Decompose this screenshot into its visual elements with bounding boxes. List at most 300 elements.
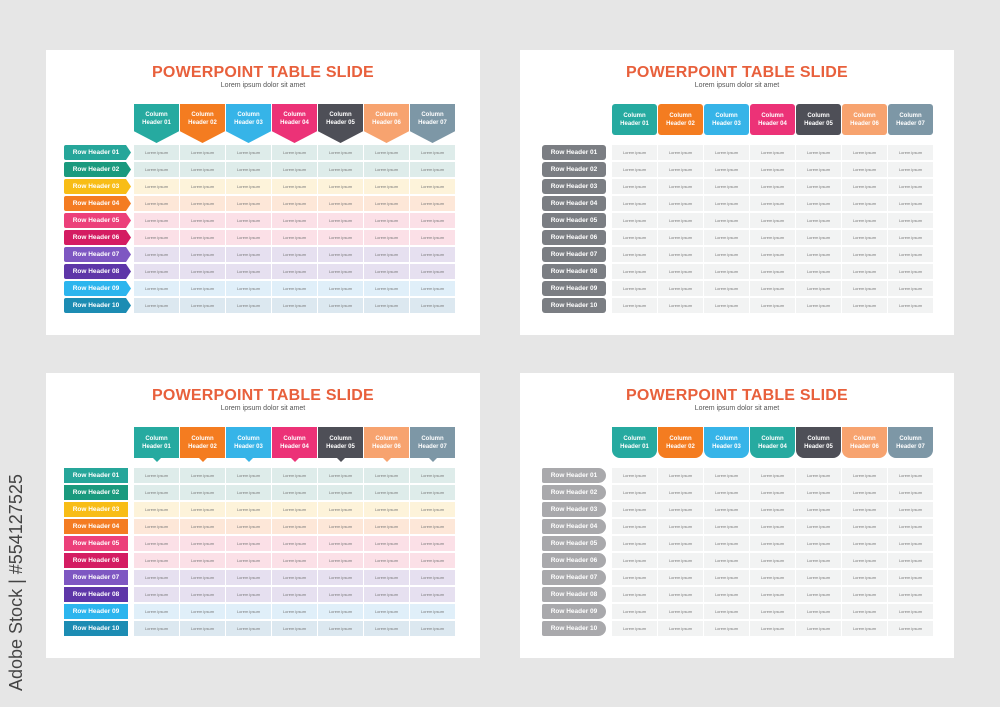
table rows: Lorem ipsum bbox=[145, 269, 168, 274]
table rows: Lorem ipsum bbox=[421, 507, 444, 512]
table rows: Lorem ipsum bbox=[237, 252, 260, 257]
table rows: Lorem ipsum bbox=[421, 252, 444, 257]
table rows: Lorem ipsum bbox=[421, 524, 444, 529]
column headers: Header 05 bbox=[804, 121, 833, 127]
table rows: Row Header 10 bbox=[551, 625, 597, 632]
column headers: Header 02 bbox=[188, 444, 217, 450]
column headers: Column bbox=[715, 113, 738, 119]
table rows: Lorem ipsum bbox=[853, 184, 876, 189]
table rows: Row Header 09 bbox=[551, 285, 597, 292]
table rows: Row Header 03 bbox=[73, 183, 119, 190]
column headers: Header 06 bbox=[850, 121, 879, 127]
table rows: Lorem ipsum bbox=[853, 235, 876, 240]
table rows: Lorem ipsum bbox=[237, 184, 260, 189]
table rows: Row Header 08 bbox=[73, 268, 119, 275]
table rows: Lorem ipsum bbox=[899, 269, 922, 274]
table rows: Lorem ipsum bbox=[669, 490, 692, 495]
table rows: Row Header 02 bbox=[73, 489, 119, 496]
table rows: Lorem ipsum bbox=[191, 473, 214, 478]
table rows: Lorem ipsum bbox=[237, 558, 260, 563]
table rows: Lorem ipsum bbox=[145, 167, 168, 172]
table rows: Lorem ipsum bbox=[329, 558, 352, 563]
table rows: Lorem ipsum bbox=[899, 286, 922, 291]
table rows: Lorem ipsum bbox=[191, 524, 214, 529]
column headers: Header 07 bbox=[418, 444, 447, 450]
table rows: Lorem ipsum bbox=[623, 473, 646, 478]
table rows: Lorem ipsum bbox=[283, 558, 306, 563]
column headers: Header 04 bbox=[758, 444, 787, 450]
table rows: Row Header 02 bbox=[551, 166, 597, 173]
table rows: Lorem ipsum bbox=[375, 592, 398, 597]
table rows: Lorem ipsum bbox=[283, 609, 306, 614]
table rows: Lorem ipsum bbox=[329, 592, 352, 597]
subtitle: Lorem ipsum dolor sit amet bbox=[695, 82, 779, 89]
table rows: Lorem ipsum bbox=[145, 473, 168, 478]
column headers: Header 02 bbox=[188, 120, 217, 126]
column headers: Column bbox=[807, 436, 830, 442]
table rows: Lorem ipsum bbox=[329, 269, 352, 274]
table rows: Lorem ipsum bbox=[853, 218, 876, 223]
table rows: Lorem ipsum bbox=[191, 558, 214, 563]
table rows: Lorem ipsum bbox=[237, 167, 260, 172]
table rows: Lorem ipsum bbox=[899, 184, 922, 189]
table rows: Lorem ipsum bbox=[237, 575, 260, 580]
table rows: Row Header 07 bbox=[551, 251, 597, 258]
table rows: Lorem ipsum bbox=[807, 184, 830, 189]
table rows: Lorem ipsum bbox=[761, 609, 784, 614]
table rows: Lorem ipsum bbox=[715, 558, 738, 563]
table rows: Lorem ipsum bbox=[329, 201, 352, 206]
column headers: Column bbox=[899, 436, 922, 442]
table rows: Row Header 02 bbox=[551, 489, 597, 496]
table rows: Lorem ipsum bbox=[715, 235, 738, 240]
table rows: Row Header 08 bbox=[73, 591, 119, 598]
column headers bbox=[612, 104, 933, 135]
column headers bbox=[134, 104, 455, 143]
column headers: Column bbox=[191, 112, 214, 118]
table rows: Lorem ipsum bbox=[329, 609, 352, 614]
column headers: Header 01 bbox=[620, 444, 649, 450]
table rows: Lorem ipsum bbox=[237, 626, 260, 631]
table rows: Lorem ipsum bbox=[669, 541, 692, 546]
table rows: Lorem ipsum bbox=[761, 626, 784, 631]
table rows: Lorem ipsum bbox=[807, 507, 830, 512]
table rows: Lorem ipsum bbox=[807, 218, 830, 223]
table rows: Lorem ipsum bbox=[421, 269, 444, 274]
column headers bbox=[612, 427, 933, 458]
table rows: Lorem ipsum bbox=[145, 609, 168, 614]
table rows: Lorem ipsum bbox=[329, 252, 352, 257]
table rows: Row Header 10 bbox=[73, 625, 119, 632]
table rows: Lorem ipsum bbox=[283, 507, 306, 512]
table rows: Lorem ipsum bbox=[807, 167, 830, 172]
table rows: Lorem ipsum bbox=[329, 167, 352, 172]
table rows: Lorem ipsum bbox=[421, 167, 444, 172]
table rows: Lorem ipsum bbox=[145, 524, 168, 529]
table rows: Lorem ipsum bbox=[237, 473, 260, 478]
table rows: Lorem ipsum bbox=[191, 218, 214, 223]
table rows: Lorem ipsum bbox=[191, 490, 214, 495]
table rows: Row Header 01 bbox=[73, 149, 119, 156]
table rows: Lorem ipsum bbox=[807, 303, 830, 308]
table rows: Lorem ipsum bbox=[715, 201, 738, 206]
table rows: Row Header 05 bbox=[73, 540, 119, 547]
table rows: Lorem ipsum bbox=[375, 303, 398, 308]
table rows: Lorem ipsum bbox=[283, 473, 306, 478]
table rows: Row Header 06 bbox=[551, 234, 597, 241]
table rows: Lorem ipsum bbox=[623, 303, 646, 308]
table rows: Lorem ipsum bbox=[421, 626, 444, 631]
table rows: Lorem ipsum bbox=[329, 184, 352, 189]
column headers: Header 05 bbox=[326, 444, 355, 450]
table rows: Lorem ipsum bbox=[191, 286, 214, 291]
table rows: Lorem ipsum bbox=[237, 609, 260, 614]
table rows: Lorem ipsum bbox=[669, 218, 692, 223]
table rows: Lorem ipsum bbox=[761, 507, 784, 512]
table rows: Lorem ipsum bbox=[761, 252, 784, 257]
table rows: Lorem ipsum bbox=[283, 541, 306, 546]
table rows: Lorem ipsum bbox=[761, 558, 784, 563]
subtitle: Lorem ipsum dolor sit amet bbox=[695, 405, 779, 412]
column headers: Column bbox=[375, 436, 398, 442]
table rows: Lorem ipsum bbox=[145, 235, 168, 240]
table rows: Lorem ipsum bbox=[853, 167, 876, 172]
table rows: Row Header 01 bbox=[551, 149, 597, 156]
column headers: Column bbox=[145, 436, 168, 442]
table rows: Lorem ipsum bbox=[899, 609, 922, 614]
table rows: Lorem ipsum bbox=[807, 252, 830, 257]
table rows: Lorem ipsum bbox=[715, 575, 738, 580]
table rows: Lorem ipsum bbox=[853, 490, 876, 495]
column headers: Column bbox=[237, 112, 260, 118]
column headers: Header 06 bbox=[850, 444, 879, 450]
table rows: Lorem ipsum bbox=[669, 524, 692, 529]
table rows: Lorem ipsum bbox=[715, 609, 738, 614]
table rows: Lorem ipsum bbox=[669, 303, 692, 308]
table rows: Lorem ipsum bbox=[191, 235, 214, 240]
table rows: Lorem ipsum bbox=[761, 218, 784, 223]
table rows: Lorem ipsum bbox=[899, 490, 922, 495]
table rows: Lorem ipsum bbox=[421, 150, 444, 155]
table rows: Lorem ipsum bbox=[715, 184, 738, 189]
table rows: Lorem ipsum bbox=[329, 286, 352, 291]
table rows: Lorem ipsum bbox=[283, 286, 306, 291]
table rows: Lorem ipsum bbox=[761, 473, 784, 478]
table rows: Lorem ipsum bbox=[145, 592, 168, 597]
table rows: Lorem ipsum bbox=[623, 490, 646, 495]
table rows: Lorem ipsum bbox=[807, 490, 830, 495]
table rows: Lorem ipsum bbox=[283, 150, 306, 155]
table rows: Lorem ipsum bbox=[145, 626, 168, 631]
table rows bbox=[542, 468, 933, 636]
table rows: Lorem ipsum bbox=[623, 218, 646, 223]
table rows: Lorem ipsum bbox=[899, 303, 922, 308]
table rows: Row Header 09 bbox=[73, 608, 119, 615]
table rows: Lorem ipsum bbox=[715, 592, 738, 597]
column headers: Header 03 bbox=[234, 444, 263, 450]
column headers: Column bbox=[715, 436, 738, 442]
column headers: Header 02 bbox=[666, 121, 695, 127]
table rows: Lorem ipsum bbox=[237, 592, 260, 597]
table rows: Lorem ipsum bbox=[623, 626, 646, 631]
table rows: Lorem ipsum bbox=[669, 473, 692, 478]
table rows: Lorem ipsum bbox=[623, 592, 646, 597]
table rows: Lorem ipsum bbox=[237, 303, 260, 308]
table rows: Row Header 08 bbox=[551, 591, 597, 598]
table rows: Lorem ipsum bbox=[715, 150, 738, 155]
table rows: Lorem ipsum bbox=[375, 558, 398, 563]
column headers: Header 07 bbox=[896, 121, 925, 127]
table rows: Lorem ipsum bbox=[669, 269, 692, 274]
table rows: Lorem ipsum bbox=[899, 252, 922, 257]
table rows: Lorem ipsum bbox=[283, 575, 306, 580]
table rows: Lorem ipsum bbox=[191, 507, 214, 512]
table rows: Lorem ipsum bbox=[899, 218, 922, 223]
table rows: Lorem ipsum bbox=[807, 575, 830, 580]
table rows: Lorem ipsum bbox=[669, 252, 692, 257]
table rows: Row Header 02 bbox=[73, 166, 119, 173]
table rows: Lorem ipsum bbox=[853, 575, 876, 580]
table rows: Lorem ipsum bbox=[421, 473, 444, 478]
table rows: Lorem ipsum bbox=[191, 252, 214, 257]
table rows: Lorem ipsum bbox=[853, 269, 876, 274]
table rows: Lorem ipsum bbox=[375, 609, 398, 614]
table rows: Lorem ipsum bbox=[421, 286, 444, 291]
table rows: Lorem ipsum bbox=[421, 184, 444, 189]
table rows: Lorem ipsum bbox=[761, 490, 784, 495]
table rows: Row Header 05 bbox=[551, 217, 597, 224]
table rows: Lorem ipsum bbox=[329, 626, 352, 631]
column headers: Column bbox=[623, 436, 646, 442]
table rows: Lorem ipsum bbox=[375, 473, 398, 478]
table rows: Lorem ipsum bbox=[421, 575, 444, 580]
column headers: Column bbox=[669, 436, 692, 442]
table rows: Lorem ipsum bbox=[669, 609, 692, 614]
title: POWERPOINT TABLE SLIDE bbox=[152, 64, 374, 81]
subtitle: Lorem ipsum dolor sit amet bbox=[221, 82, 305, 89]
column headers: Column bbox=[283, 112, 306, 118]
table rows: Lorem ipsum bbox=[421, 592, 444, 597]
table rows: Lorem ipsum bbox=[329, 150, 352, 155]
title: POWERPOINT TABLE SLIDE bbox=[626, 387, 848, 404]
table rows: Row Header 06 bbox=[73, 557, 119, 564]
column headers: Column bbox=[283, 436, 306, 442]
table rows: Lorem ipsum bbox=[283, 626, 306, 631]
table rows: Lorem ipsum bbox=[191, 184, 214, 189]
table rows: Lorem ipsum bbox=[191, 269, 214, 274]
table rows: Lorem ipsum bbox=[375, 218, 398, 223]
table rows: Lorem ipsum bbox=[145, 286, 168, 291]
column headers: Column bbox=[191, 436, 214, 442]
table rows: Lorem ipsum bbox=[329, 541, 352, 546]
panel: slide top-left (arrow style) bbox=[46, 50, 480, 335]
column headers: Column bbox=[421, 436, 444, 442]
table rows: Lorem ipsum bbox=[283, 167, 306, 172]
column headers: Header 06 bbox=[372, 444, 401, 450]
panel: slide bottom-left (notch style) bbox=[46, 373, 480, 658]
table rows: Lorem ipsum bbox=[761, 235, 784, 240]
column headers: Column bbox=[761, 436, 784, 442]
table rows: Lorem ipsum bbox=[623, 286, 646, 291]
table rows: Lorem ipsum bbox=[715, 218, 738, 223]
table rows: Lorem ipsum bbox=[669, 626, 692, 631]
table rows: Lorem ipsum bbox=[807, 235, 830, 240]
table rows: Lorem ipsum bbox=[329, 575, 352, 580]
table rows: Lorem ipsum bbox=[853, 303, 876, 308]
table rows: Lorem ipsum bbox=[145, 541, 168, 546]
table rows: Lorem ipsum bbox=[237, 218, 260, 223]
table rows: Lorem ipsum bbox=[853, 524, 876, 529]
table rows: Lorem ipsum bbox=[853, 150, 876, 155]
table rows: Lorem ipsum bbox=[237, 201, 260, 206]
table rows: Lorem ipsum bbox=[669, 184, 692, 189]
table rows: Lorem ipsum bbox=[853, 473, 876, 478]
table rows: Lorem ipsum bbox=[807, 626, 830, 631]
column headers: Column bbox=[853, 113, 876, 119]
table rows: Lorem ipsum bbox=[899, 473, 922, 478]
column headers: Column bbox=[669, 113, 692, 119]
table rows: Lorem ipsum bbox=[761, 524, 784, 529]
title: POWERPOINT TABLE SLIDE bbox=[152, 387, 374, 404]
table rows: Row Header 01 bbox=[551, 472, 597, 479]
table rows: Lorem ipsum bbox=[421, 303, 444, 308]
table rows: Lorem ipsum bbox=[853, 286, 876, 291]
table rows: Row Header 05 bbox=[73, 217, 119, 224]
table rows: Lorem ipsum bbox=[623, 184, 646, 189]
table rows: Lorem ipsum bbox=[623, 558, 646, 563]
table rows: Lorem ipsum bbox=[669, 507, 692, 512]
table rows: Lorem ipsum bbox=[145, 507, 168, 512]
table rows: Lorem ipsum bbox=[899, 524, 922, 529]
table rows: Lorem ipsum bbox=[191, 303, 214, 308]
table rows: Lorem ipsum bbox=[715, 626, 738, 631]
table rows: Row Header 05 bbox=[551, 540, 597, 547]
table rows: Lorem ipsum bbox=[715, 507, 738, 512]
table rows: Lorem ipsum bbox=[145, 184, 168, 189]
table rows: Lorem ipsum bbox=[623, 201, 646, 206]
table rows: Lorem ipsum bbox=[807, 286, 830, 291]
table rows: Row Header 03 bbox=[551, 183, 597, 190]
column headers: Header 01 bbox=[620, 121, 649, 127]
table rows: Lorem ipsum bbox=[145, 218, 168, 223]
table rows: Lorem ipsum bbox=[329, 490, 352, 495]
table rows: Lorem ipsum bbox=[375, 541, 398, 546]
table rows: Lorem ipsum bbox=[899, 541, 922, 546]
column headers: Header 03 bbox=[712, 121, 741, 127]
table rows: Lorem ipsum bbox=[421, 609, 444, 614]
table rows: Lorem ipsum bbox=[283, 490, 306, 495]
table rows: Lorem ipsum bbox=[283, 524, 306, 529]
table rows: Lorem ipsum bbox=[329, 218, 352, 223]
table rows: Row Header 06 bbox=[73, 234, 119, 241]
column headers: Header 05 bbox=[804, 444, 833, 450]
panel: slide bottom-right (pill gray style) bbox=[520, 373, 954, 658]
table rows: Lorem ipsum bbox=[623, 609, 646, 614]
table rows: Lorem ipsum bbox=[329, 524, 352, 529]
table rows: Lorem ipsum bbox=[283, 303, 306, 308]
column headers: Column bbox=[623, 113, 646, 119]
table rows: Lorem ipsum bbox=[669, 286, 692, 291]
table rows: Lorem ipsum bbox=[807, 592, 830, 597]
table rows: Row Header 04 bbox=[73, 200, 119, 207]
table rows: Lorem ipsum bbox=[237, 286, 260, 291]
table rows: Lorem ipsum bbox=[761, 167, 784, 172]
column headers: Header 01 bbox=[142, 120, 171, 126]
table rows: Row Header 07 bbox=[551, 574, 597, 581]
column headers: Header 06 bbox=[372, 120, 401, 126]
table rows: Lorem ipsum bbox=[669, 150, 692, 155]
table rows: Lorem ipsum bbox=[237, 524, 260, 529]
table rows: Row Header 10 bbox=[551, 302, 597, 309]
table rows: Lorem ipsum bbox=[145, 252, 168, 257]
table rows: Lorem ipsum bbox=[715, 473, 738, 478]
table rows: Row Header 09 bbox=[551, 608, 597, 615]
table rows: Lorem ipsum bbox=[761, 150, 784, 155]
table rows: Lorem ipsum bbox=[807, 473, 830, 478]
table rows: Lorem ipsum bbox=[899, 201, 922, 206]
table rows: Row Header 07 bbox=[73, 574, 119, 581]
table rows: Lorem ipsum bbox=[421, 235, 444, 240]
table rows: Row Header 06 bbox=[551, 557, 597, 564]
table rows: Lorem ipsum bbox=[807, 269, 830, 274]
table rows: Row Header 10 bbox=[73, 302, 119, 309]
table rows: Lorem ipsum bbox=[283, 592, 306, 597]
table rows: Lorem ipsum bbox=[761, 575, 784, 580]
table rows: Lorem ipsum bbox=[807, 609, 830, 614]
table rows: Lorem ipsum bbox=[761, 184, 784, 189]
table rows: Lorem ipsum bbox=[375, 490, 398, 495]
title: POWERPOINT TABLE SLIDE bbox=[626, 64, 848, 81]
table rows: Lorem ipsum bbox=[421, 541, 444, 546]
table rows: Lorem ipsum bbox=[237, 541, 260, 546]
column headers: Column bbox=[329, 112, 352, 118]
table rows: Lorem ipsum bbox=[623, 575, 646, 580]
column headers: Column bbox=[375, 112, 398, 118]
column headers: Header 01 bbox=[142, 444, 171, 450]
table rows: Lorem ipsum bbox=[191, 150, 214, 155]
table rows: Lorem ipsum bbox=[145, 558, 168, 563]
table rows: Lorem ipsum bbox=[375, 150, 398, 155]
column headers: Header 04 bbox=[280, 444, 309, 450]
table rows: Lorem ipsum bbox=[669, 592, 692, 597]
table rows: Lorem ipsum bbox=[761, 201, 784, 206]
table rows: Lorem ipsum bbox=[421, 490, 444, 495]
table rows: Lorem ipsum bbox=[623, 235, 646, 240]
column headers: Column bbox=[761, 113, 784, 119]
table rows: Lorem ipsum bbox=[283, 201, 306, 206]
table rows: Lorem ipsum bbox=[191, 541, 214, 546]
table rows: Lorem ipsum bbox=[715, 286, 738, 291]
table rows: Lorem ipsum bbox=[375, 184, 398, 189]
table rows: Lorem ipsum bbox=[669, 201, 692, 206]
table rows: Lorem ipsum bbox=[375, 201, 398, 206]
table rows: Lorem ipsum bbox=[715, 303, 738, 308]
table rows: Row Header 08 bbox=[551, 268, 597, 275]
column headers: Column bbox=[237, 436, 260, 442]
table rows: Lorem ipsum bbox=[145, 303, 168, 308]
table rows: Lorem ipsum bbox=[807, 201, 830, 206]
table rows: Lorem ipsum bbox=[623, 507, 646, 512]
table rows: Lorem ipsum bbox=[145, 201, 168, 206]
table rows: Lorem ipsum bbox=[145, 490, 168, 495]
table rows: Lorem ipsum bbox=[761, 303, 784, 308]
table rows: Lorem ipsum bbox=[761, 541, 784, 546]
column headers bbox=[134, 427, 455, 462]
column headers: Header 02 bbox=[666, 444, 695, 450]
table rows: Lorem ipsum bbox=[375, 286, 398, 291]
column headers: Header 04 bbox=[280, 120, 309, 126]
subtitle: Lorem ipsum dolor sit amet bbox=[221, 405, 305, 412]
